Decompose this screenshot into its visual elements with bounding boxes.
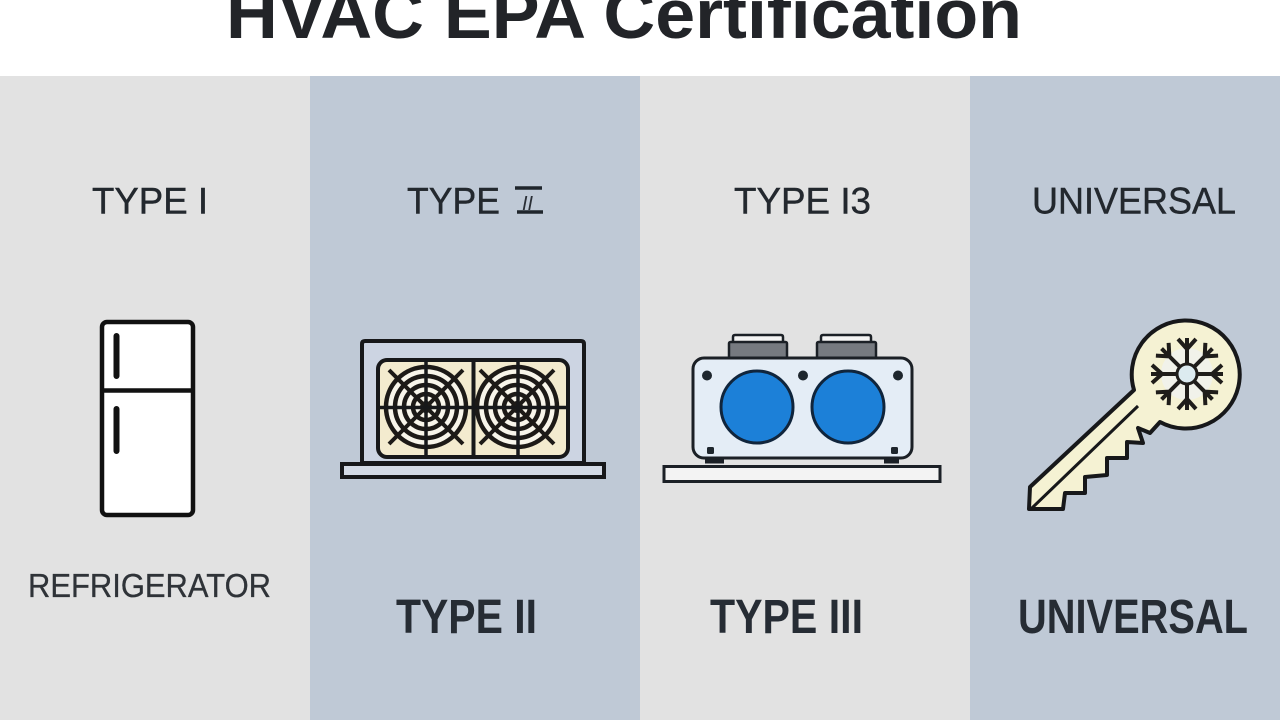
panel: Type II xyxy=(310,76,640,720)
heading: Type I3: TYPE I3 xyxy=(734,180,871,222)
panel: Type III xyxy=(640,76,970,720)
caption: Type II: TYPE II xyxy=(396,591,537,644)
icon: key with snowflake xyxy=(1029,321,1240,509)
panel: Universal xyxy=(970,76,1280,720)
icon: chiller with two blue circles xyxy=(664,335,940,482)
title xyxy=(0,0,1280,76)
caption: Type III: TYPE III xyxy=(710,591,863,644)
caption: refrigerator: REFRIGERATOR xyxy=(28,567,271,604)
heading: Type II: II xyxy=(522,193,533,215)
panel: Type I xyxy=(0,76,310,720)
icon: snowflake xyxy=(1151,338,1223,410)
heading: Universal: UNIVERSAL xyxy=(1032,180,1236,222)
icon: refrigerator xyxy=(102,322,193,515)
icon: condenser with two fans xyxy=(342,341,604,477)
heading: Type II: TYPE xyxy=(407,180,500,222)
heading: Type I: TYPE I xyxy=(92,180,208,222)
